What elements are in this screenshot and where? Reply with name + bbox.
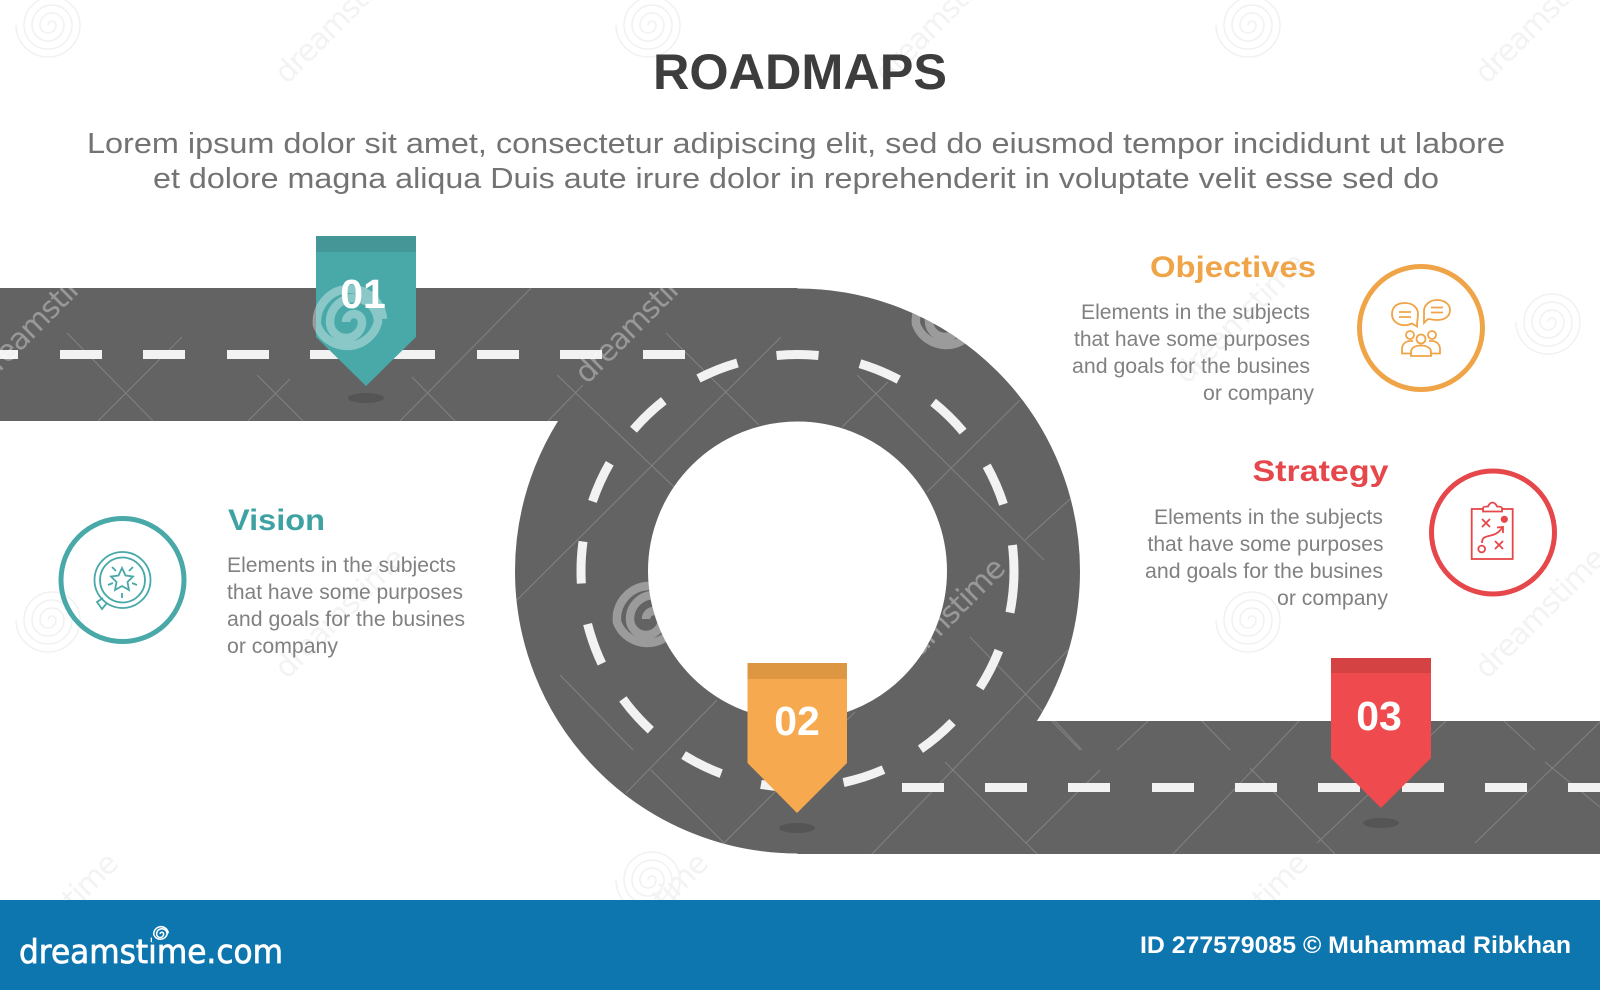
text: vision body: or company <box>227 634 338 658</box>
footer logo: dreamstime.com <box>19 932 283 971</box>
faint watermark pattern: dreamstime <box>571 846 716 990</box>
panel: strategy <box>1145 455 1554 610</box>
text: strategy body: Elements in the subjects <box>1154 505 1383 529</box>
road: circular loop <box>582 355 1014 787</box>
road watermark <box>0 246 1013 696</box>
marker 03: 03 <box>1356 693 1402 739</box>
lower lane dashes <box>902 783 1600 792</box>
icon: strategy circle <box>1432 471 1554 594</box>
road <box>0 288 1600 854</box>
road: upper straight <box>0 288 798 421</box>
marker 03 <box>1331 658 1431 828</box>
icon: vision circle <box>61 518 184 642</box>
road texture lines <box>67 288 1600 854</box>
text: vision body: Elements in the subjects <box>227 553 456 577</box>
marker 02 <box>748 663 847 833</box>
road watermark: dreamstime <box>868 551 1013 696</box>
road: lower straight <box>798 721 1600 854</box>
faint watermark pattern: dreamstime <box>1168 246 1313 391</box>
footer credit: ID 277579085 © Muhammad Ribkhan <box>1140 932 1571 959</box>
marker 02: 02 <box>774 698 820 744</box>
loop lane dashes <box>561 335 1034 807</box>
subtitle text <box>87 128 1505 195</box>
marker 01 number: 01 <box>340 271 386 317</box>
subtitle text: Lorem ipsum dolor sit amet, consectetur adipiscing elit, sed do eiusmod tempor incididunt ut labore <box>87 128 1505 160</box>
icon: objectives circle <box>1360 266 1482 390</box>
heading: strategy: Strategy <box>1252 455 1389 488</box>
road watermark: dreamstime <box>568 246 713 391</box>
upper lane dashes <box>0 350 685 359</box>
text: objectives body: that have some purposes <box>1074 327 1310 351</box>
marker 01 <box>316 236 416 403</box>
panel: objectives <box>1072 251 1482 405</box>
subtitle text: et dolore magna aliqua Duis aute irure dolor in reprehenderit in voluptate velit esse sed do <box>153 163 1439 195</box>
text: strategy body <box>1145 505 1388 610</box>
heading: vision: Vision <box>228 504 325 537</box>
text: objectives body: or company <box>1203 381 1314 405</box>
faint watermark pattern: dreamstime <box>268 541 413 686</box>
text: vision body: and goals for the busines <box>227 607 465 631</box>
panel: vision <box>61 504 465 658</box>
text: strategy body: that have some purposes <box>1148 532 1384 556</box>
lane dashes <box>0 335 1600 807</box>
heading: objectives: Objectives <box>1150 251 1316 284</box>
text: vision body: that have some purposes <box>227 580 463 604</box>
text: strategy body: or company <box>1277 586 1388 610</box>
text: vision body <box>227 553 465 658</box>
faint watermark pattern: dreamstime <box>1171 846 1316 990</box>
text: objectives body: and goals for the busines <box>1072 354 1310 378</box>
footer bar <box>0 900 1600 990</box>
title: ROADMAPS <box>653 44 947 100</box>
text: objectives body <box>1072 300 1314 405</box>
text: strategy body: and goals for the busines <box>1145 559 1383 583</box>
text: objectives body: Elements in the subjects <box>1081 300 1310 324</box>
